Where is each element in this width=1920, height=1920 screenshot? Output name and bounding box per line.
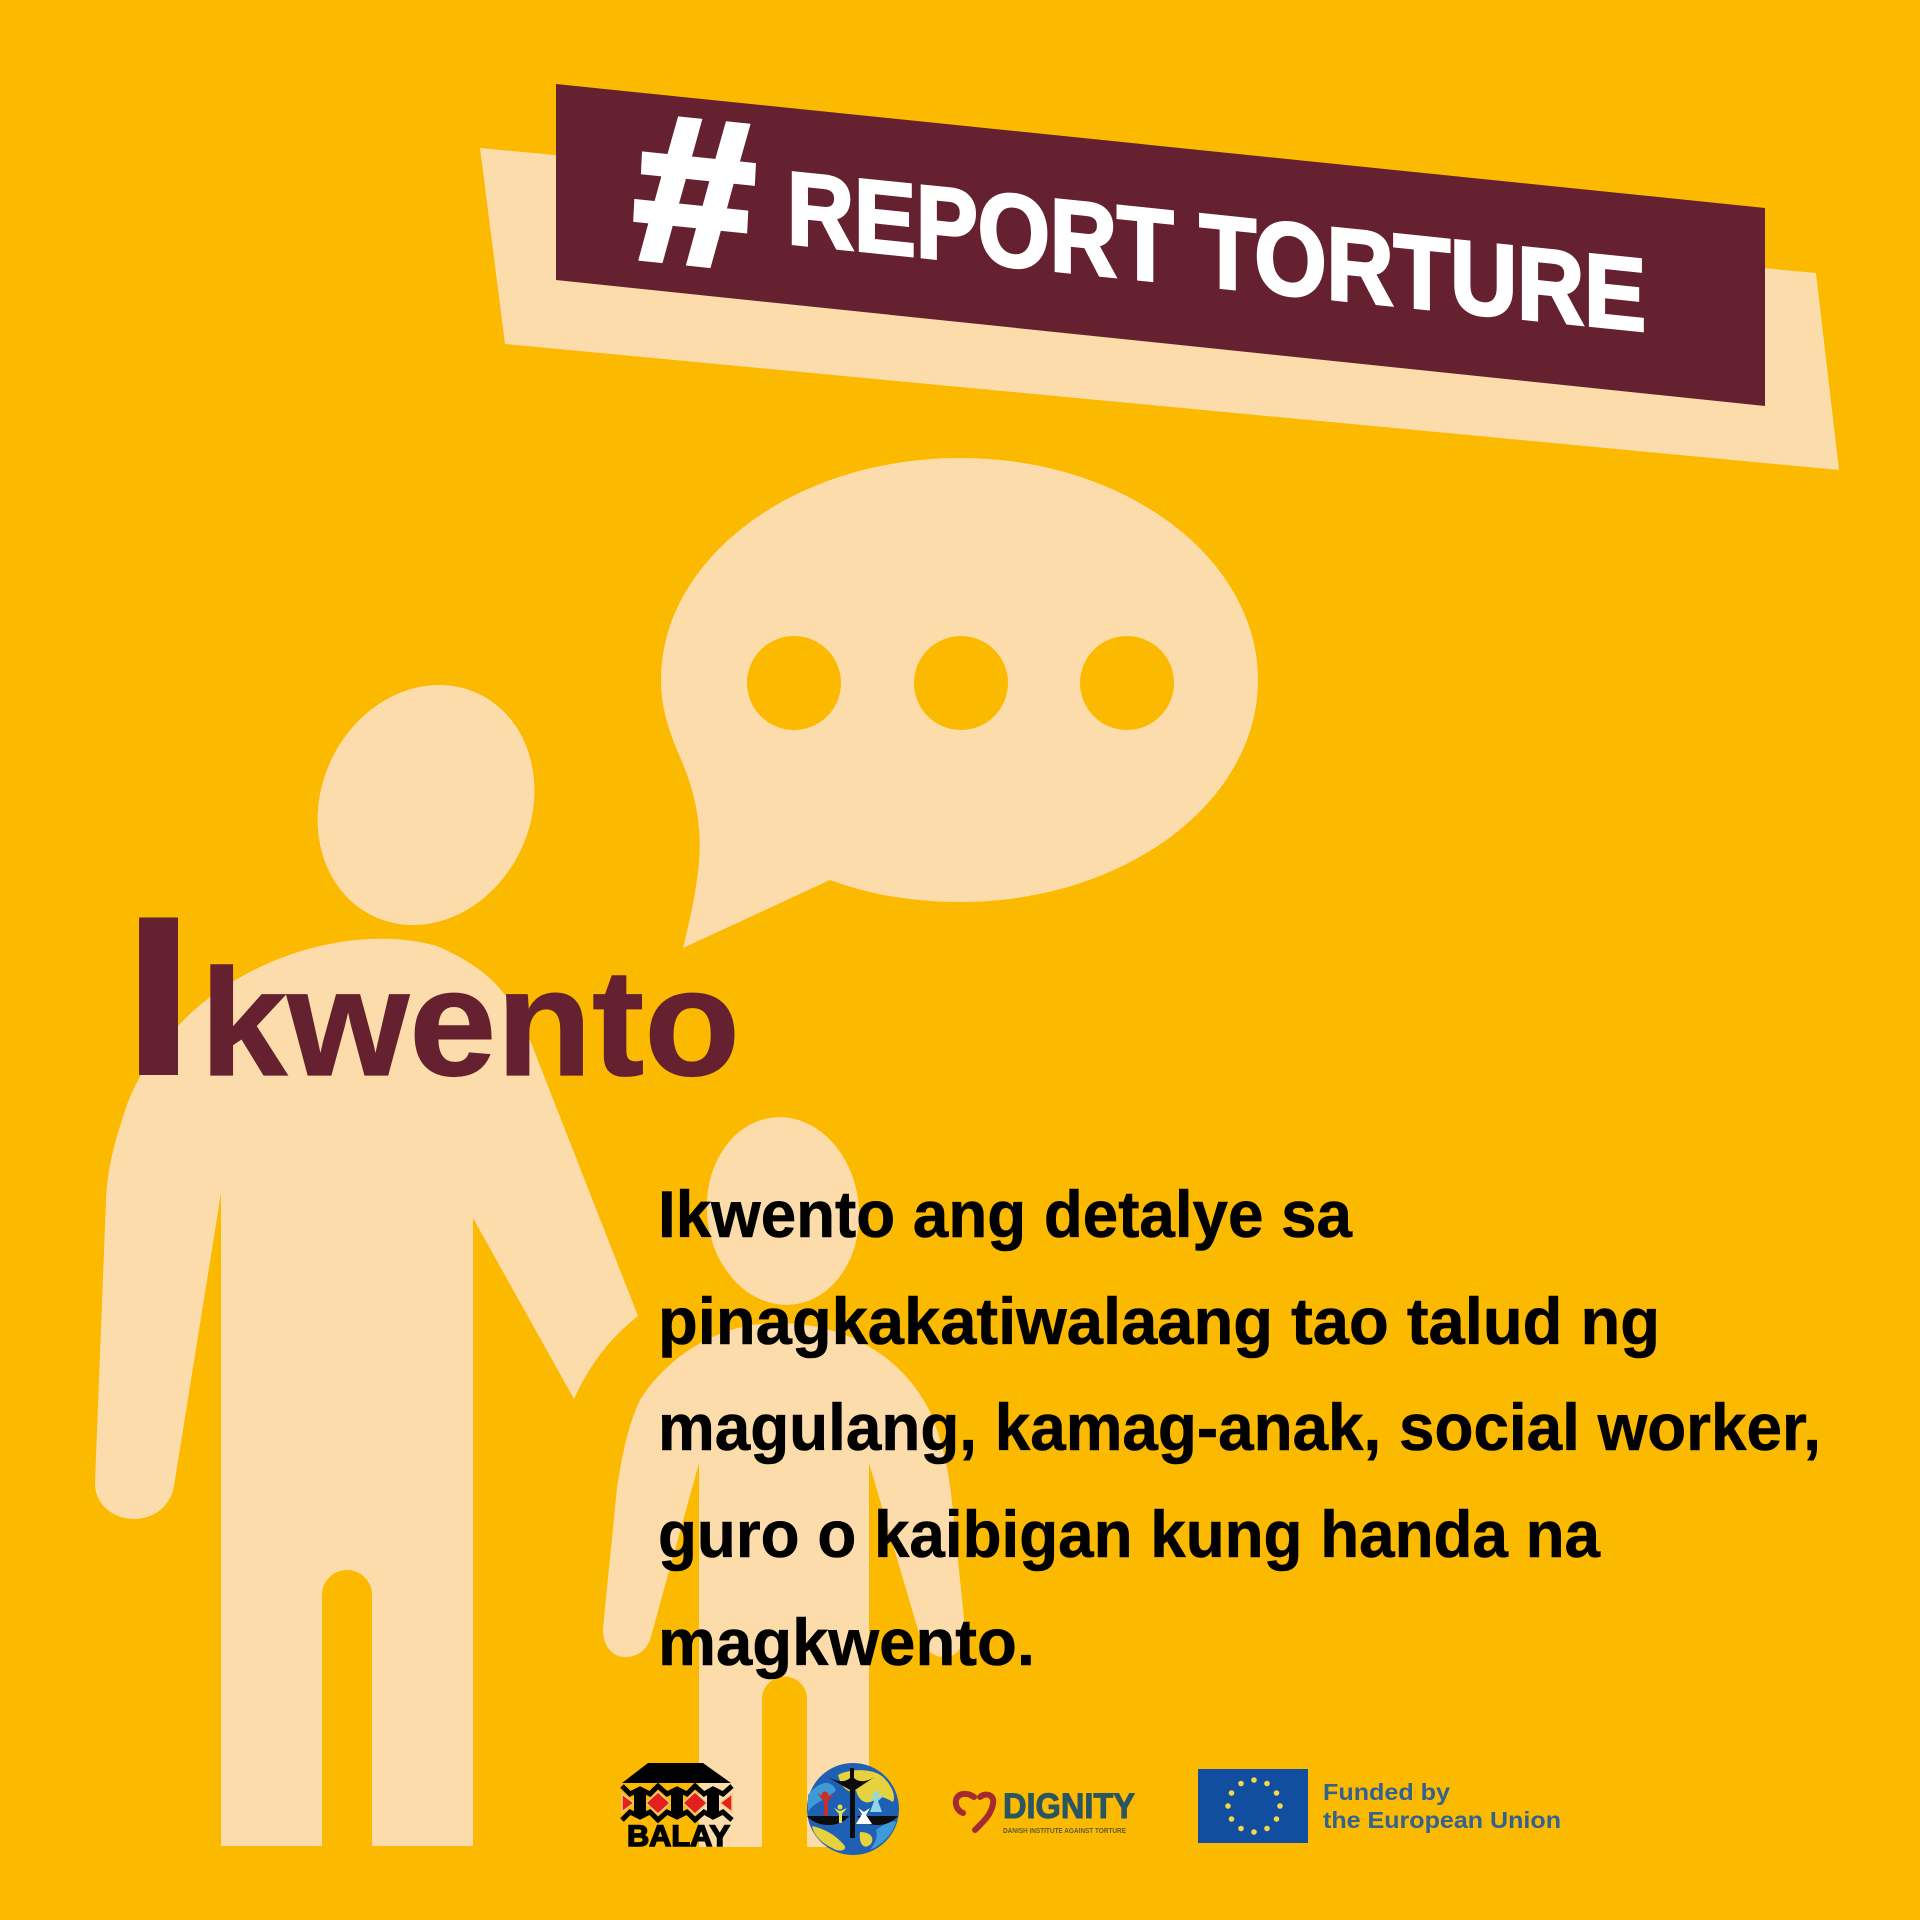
EU caption line 1: Funded by [1323, 1779, 1450, 1805]
Balay roof [622, 1763, 731, 1783]
adult body [95, 939, 638, 1846]
body line 3: magulang, kamag-anak, social worker, [658, 1390, 1821, 1464]
icon: adult figure [95, 649, 638, 1846]
title large initial: I [121, 868, 196, 1124]
EU caption line 2: the European Union [1323, 1807, 1561, 1833]
Dignity wordmark: DIGNITY [1003, 1787, 1135, 1826]
EU flag [1198, 1769, 1308, 1843]
icon: child figure [603, 1110, 965, 1847]
banner hash symbol: # [630, 71, 759, 312]
EU stars [1225, 1777, 1283, 1835]
globe yellow land [812, 1770, 894, 1851]
Dignity heart [956, 1794, 993, 1830]
figures on scale [817, 1791, 886, 1824]
Balay wordmark: BALAY [627, 1820, 730, 1853]
body line 5: magkwento. [658, 1605, 1035, 1679]
body line 2: pinagkakatiwalaang tao talud ng [658, 1284, 1660, 1358]
icon: speech bubble [661, 458, 1258, 948]
Dignity tagline: DANISH INSTITUTE AGAINST TORTURE [1003, 1828, 1126, 1835]
speech bubble shape [661, 458, 1258, 948]
title remaining letters: kwento [200, 938, 740, 1108]
banner: report torture [480, 71, 1839, 470]
logo: scales and globe [807, 1763, 899, 1855]
child body [603, 1323, 965, 1847]
banner backing shape [480, 148, 1839, 470]
globe light blue water [808, 1783, 896, 1850]
banner heading: REPORT TORTURE [787, 150, 1646, 353]
Balay woven pattern [622, 1786, 732, 1820]
body line 4: guro o kaibigan kung handa na [658, 1497, 1601, 1571]
adult head [279, 649, 573, 961]
body line 1: Ikwento ang detalye sa [658, 1177, 1353, 1251]
speech bubble dots [747, 636, 1174, 730]
scale beam and pans [807, 1768, 898, 1838]
logo: Balay [622, 1763, 732, 1853]
banner maroon panel [556, 84, 1765, 406]
body text [658, 1177, 1821, 1679]
child head [698, 1110, 868, 1312]
logo: European Union [1198, 1769, 1561, 1843]
globe [807, 1763, 899, 1855]
title [121, 868, 740, 1124]
logo: Dignity [956, 1787, 1135, 1835]
